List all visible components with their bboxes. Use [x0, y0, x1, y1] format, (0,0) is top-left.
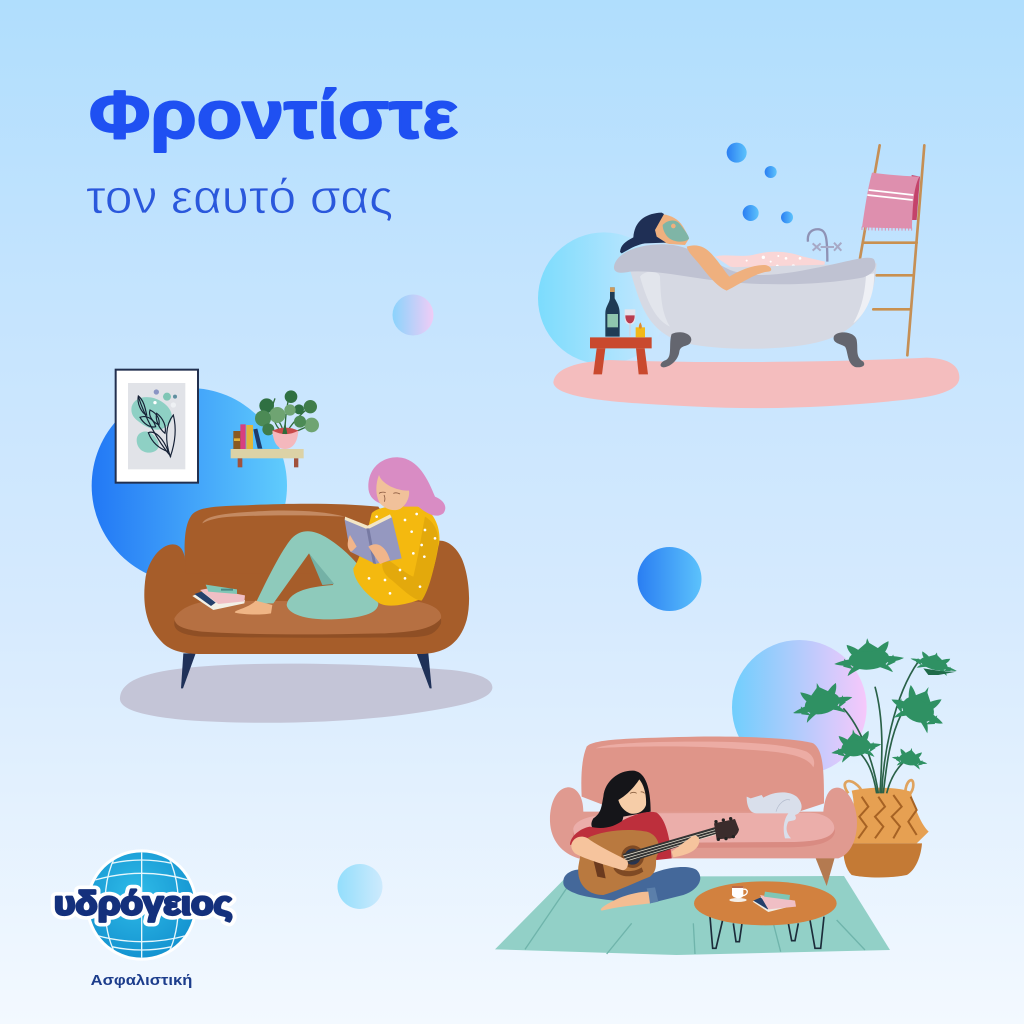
- scene: woman reading on sofa: [92, 370, 492, 723]
- woman: bare foot: [235, 601, 272, 615]
- open book: [344, 514, 402, 564]
- coffee cup: [729, 886, 747, 902]
- brown sofa: [144, 504, 469, 654]
- acoustic guitar: [578, 817, 739, 895]
- woman: hair: [368, 457, 445, 516]
- floor shadow: [120, 664, 492, 723]
- towel ladder: [860, 145, 924, 355]
- scene: woman in bath: [538, 143, 959, 408]
- plant leaves: [787, 635, 960, 771]
- plant stems: [843, 662, 918, 793]
- wine glass: [625, 309, 635, 336]
- pink sofa leg: [815, 857, 835, 886]
- woman: bare foot: [601, 892, 650, 911]
- pink towel: [862, 173, 920, 231]
- woman: arms: [571, 836, 699, 870]
- title: [86, 77, 458, 223]
- pink sofa: [550, 737, 857, 858]
- table books: [753, 892, 796, 912]
- woman: yellow sweater: [353, 506, 440, 606]
- coffee table: [694, 881, 837, 948]
- woman: jeans: [563, 867, 700, 903]
- woman's head: [620, 213, 689, 253]
- backdrop circle: [538, 232, 670, 364]
- woman: hair back: [591, 771, 651, 833]
- foam: [715, 252, 825, 271]
- wordmark: υδρόγειος: [54, 886, 233, 923]
- claw feet: [661, 332, 864, 367]
- woman: red top: [570, 812, 672, 860]
- bath tap: [808, 229, 841, 262]
- woman's arm and torso: [687, 245, 771, 291]
- woman: face: [618, 779, 646, 814]
- side table: [590, 337, 652, 374]
- title: Φροντίστε: [89, 77, 458, 153]
- woven basket: [843, 780, 929, 877]
- framed picture: [116, 370, 198, 483]
- green rug: [495, 876, 890, 955]
- subtitle: τον εαυτό σας: [86, 170, 393, 223]
- wordmark: υδρόγειος: [54, 886, 233, 923]
- woman: face: [376, 475, 409, 510]
- decorative orb: pale blue: [338, 864, 382, 909]
- woman: legs: [256, 531, 378, 619]
- blue bubbles: [727, 143, 793, 223]
- backdrop circle: [732, 640, 867, 775]
- stack of books: [192, 585, 245, 610]
- tagline: Ασφαλιστική: [91, 972, 192, 989]
- potted plant: [255, 390, 319, 449]
- scene: woman playing guitar: [495, 635, 960, 955]
- sofa legs: [181, 653, 432, 688]
- white cat: [747, 792, 802, 838]
- pink rug: [553, 358, 959, 408]
- backdrop circle: [92, 388, 287, 583]
- wall shelf with books: [231, 424, 304, 467]
- globe: [86, 849, 197, 961]
- leaf shading: [923, 668, 957, 675]
- wine bottle: [605, 287, 620, 337]
- decorative orb: blue: [638, 547, 702, 611]
- candle: [636, 322, 645, 337]
- decorative orb: pink-blue: [392, 294, 434, 336]
- logo: Hydrogeios Insurance: [54, 849, 233, 989]
- bathtub: [614, 244, 877, 349]
- woman: hands: [348, 535, 390, 564]
